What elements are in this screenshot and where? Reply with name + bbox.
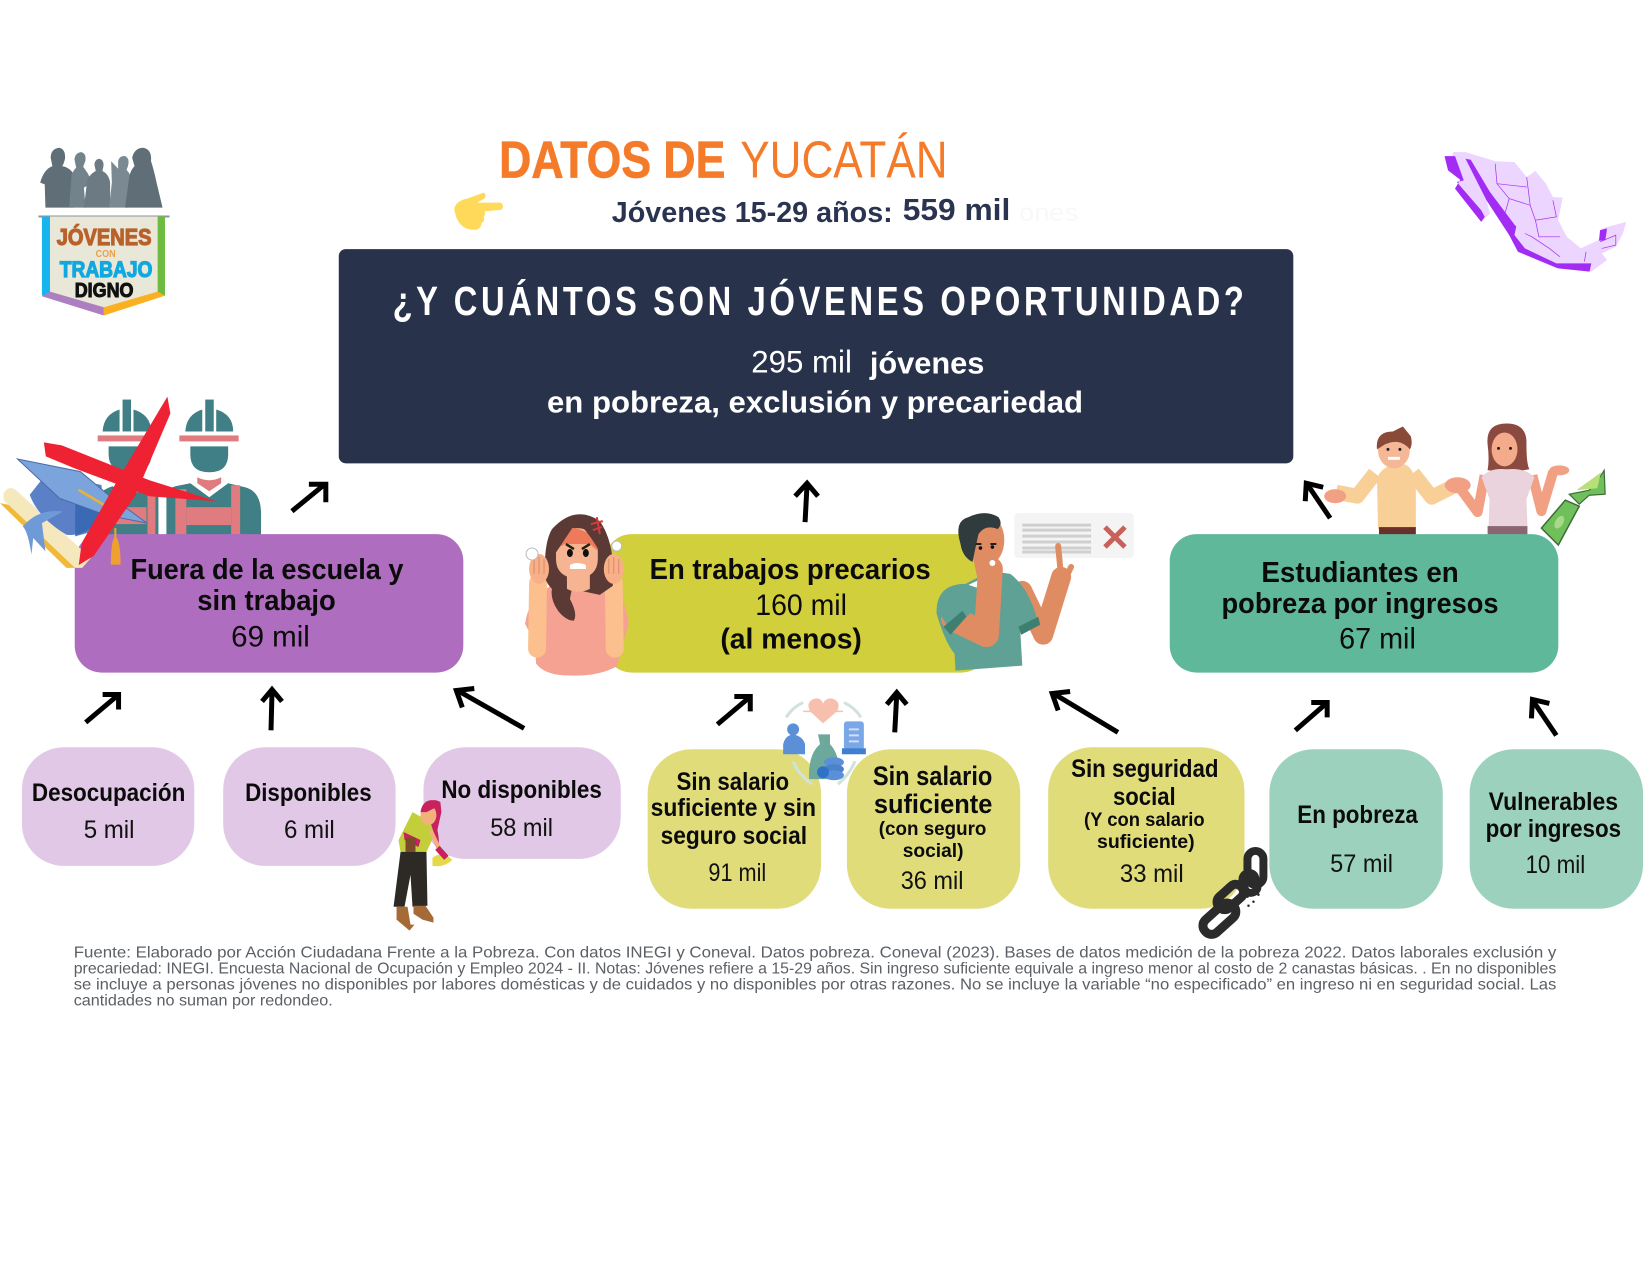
- text: source note: precariedad: INEGI. Encuesta Nacional de Ocupación y Empleo 2024 - II. Notas: Jóvenes refiere a 15-29 años. Sin ingreso suficiente equivale a ingreso menor al costo de 2 canastas básicas. . En no disponibles: [74, 960, 1557, 977]
- subtitle: youth population: Jóvenes 15-29 años:: [612, 197, 893, 229]
- arrow: from no disponibles: [456, 689, 524, 728]
- icon: thinking man: [937, 513, 1071, 671]
- panel: main question: [339, 249, 1293, 463]
- card: en pobreza: [1269, 749, 1443, 909]
- text: source note: [74, 945, 1557, 1009]
- arrow: to main box from center: [795, 483, 818, 522]
- arrow: from en pobreza: [1295, 702, 1327, 730]
- arrow: to main box from right: [1305, 483, 1330, 518]
- arrow: from sin salario: [887, 692, 907, 732]
- title: YUCATÁN: [740, 130, 948, 188]
- card: sin salario suficiente y sin seguro social: seguro social: [661, 822, 807, 850]
- panel: fuera de la escuela y sin trabajo: 69 mil: [231, 621, 310, 654]
- logo: Jóvenes con Trabajo Digno: JÓVENES: [57, 224, 151, 250]
- card: sin seguridad social: suficiente): [1097, 832, 1195, 853]
- card: disponibles: Disponibles: [245, 779, 372, 807]
- card: desocupación: Desocupación: [32, 779, 185, 807]
- text: 295 mil jóvenes: 295 mil: [751, 344, 852, 380]
- title: [499, 130, 948, 188]
- card: sin salario suficiente con seguro social: Sin salario: [873, 761, 992, 791]
- arrow: from vulnerables: [1531, 699, 1556, 735]
- card: vulnerables por ingresos: [1470, 749, 1643, 909]
- icon: broken chain: [1200, 851, 1263, 938]
- text: source note: se incluye a personas jóvenes no disponibles por labores domésticas y de cuidados y no disponibles por otras razones. No se incluye la variable “no especificado” en ingreso ni en seguridad social. Las: [74, 976, 1557, 993]
- icon: construction workers: [93, 400, 261, 539]
- arrow: from disponibles: [262, 690, 282, 730]
- logo: Jóvenes con Trabajo Digno: CON: [96, 249, 116, 260]
- card: vulnerables por ingresos: Vulnerables: [1489, 788, 1618, 816]
- panel: fuera de la escuela y sin trabajo: Fuera de la escuela y: [131, 554, 404, 586]
- arrow: from sin seguridad: [1052, 692, 1118, 732]
- arrow: to main box from left: [292, 484, 326, 511]
- card: vulnerables por ingresos: por ingresos: [1486, 815, 1621, 843]
- panel: fuera de la escuela y sin trabajo: [75, 534, 463, 673]
- icon: woman cleaning: [394, 800, 452, 931]
- panel: en trabajos precarios: 160 mil: [755, 589, 847, 622]
- panel: estudiantes en pobreza por ingresos: 67 mil: [1339, 623, 1416, 656]
- card: sin salario suficiente y sin seguro social: suficiente y sin: [651, 794, 816, 822]
- card: no disponibles: No disponibles: [441, 776, 602, 804]
- icon: social security: [783, 698, 866, 784]
- card: sin seguridad social: 33 mil: [1120, 860, 1184, 888]
- text: 295 mil jóvenes: [751, 344, 984, 381]
- subtitle: youth population: 559 mil: [903, 192, 1010, 227]
- icon: red cross-out: [44, 397, 216, 565]
- card: sin seguridad social: social: [1113, 783, 1176, 811]
- card: sin salario suficiente con seguro social: social): [903, 841, 963, 862]
- logo: Jóvenes con Trabajo Digno: DIGNO: [75, 280, 134, 302]
- icon: map of Mexico: [1445, 152, 1626, 272]
- panel: estudiantes en pobreza por ingresos: [1170, 534, 1558, 673]
- card: disponibles: [223, 747, 396, 866]
- icon: graduation cap and diploma: [0, 459, 147, 568]
- panel: en trabajos precarios: En trabajos precarios: [650, 554, 931, 586]
- card: no disponibles: 58 mil: [490, 814, 553, 842]
- subtitle: youth population: [612, 192, 1078, 229]
- panel: en trabajos precarios: (al menos): [720, 624, 862, 656]
- logo: Jóvenes con Trabajo Digno: TRABAJO: [60, 257, 152, 282]
- card: sin salario suficiente y sin seguro social: [648, 749, 821, 909]
- panel: estudiantes en pobreza por ingresos: Estudiantes en: [1261, 557, 1459, 589]
- text: en pobreza, exclusión y precariedad: en pobreza, exclusión y precariedad: [547, 385, 1083, 420]
- panel: fuera de la escuela y sin trabajo: sin trabajo: [197, 585, 336, 617]
- icon: money arrow: [1541, 470, 1605, 545]
- panel: estudiantes en pobreza por ingresos: pobreza por ingresos: [1222, 588, 1499, 620]
- card: en pobreza: En pobreza: [1297, 801, 1418, 829]
- card: sin salario suficiente y sin seguro social: Sin salario: [677, 768, 789, 796]
- arrow: from desocupación: [86, 694, 119, 722]
- card: sin seguridad social: [1048, 747, 1244, 909]
- card: disponibles: 6 mil: [284, 816, 335, 844]
- card: sin salario suficiente y sin seguro social: 91 mil: [708, 859, 766, 887]
- icon: note card with cross: [1014, 513, 1134, 558]
- text: 295 mil jóvenes: jóvenes: [869, 346, 984, 381]
- logo: Jóvenes con Trabajo Digno: [38, 148, 170, 316]
- card: sin seguridad social: Sin seguridad: [1071, 755, 1219, 783]
- arrow: from sin salario y seguro: [717, 696, 750, 724]
- icon: stressed woman: [525, 514, 629, 676]
- card: sin salario suficiente con seguro social: 36 mil: [901, 867, 963, 895]
- title: DATOS DE: [499, 130, 725, 188]
- card: sin salario suficiente con seguro social: [847, 749, 1020, 909]
- text: source note: Fuente: Elaborado por Acción Ciudadana Frente a la Pobreza. Con datos INEGI y Coneval. Datos pobreza. Coneval (2023). Bases de datos medición de la pobreza 2022. Datos laborales exclusión y: [74, 945, 1557, 962]
- icon: shrugging couple: [1324, 423, 1569, 538]
- heading: question: ¿Y CUÁNTOS SON JÓVENES OPORTUNIDAD?: [393, 277, 1244, 324]
- card: vulnerables por ingresos: 10 mil: [1525, 851, 1585, 879]
- text: source note: cantidades no suman por redondeo.: [74, 992, 333, 1009]
- panel: en trabajos precarios: [605, 534, 988, 673]
- subtitle: youth population: ones: [1019, 199, 1078, 227]
- card: sin salario suficiente con seguro social: (con seguro: [879, 819, 986, 840]
- card: en pobreza: 57 mil: [1330, 850, 1393, 878]
- icon: pointing hand: [454, 193, 503, 230]
- card: sin salario suficiente con seguro social: suficiente: [874, 789, 992, 819]
- card: no disponibles: [423, 747, 621, 859]
- card: desocupación: [22, 747, 194, 866]
- card: sin seguridad social: (Y con salario: [1084, 810, 1205, 831]
- card: desocupación: 5 mil: [84, 816, 135, 844]
